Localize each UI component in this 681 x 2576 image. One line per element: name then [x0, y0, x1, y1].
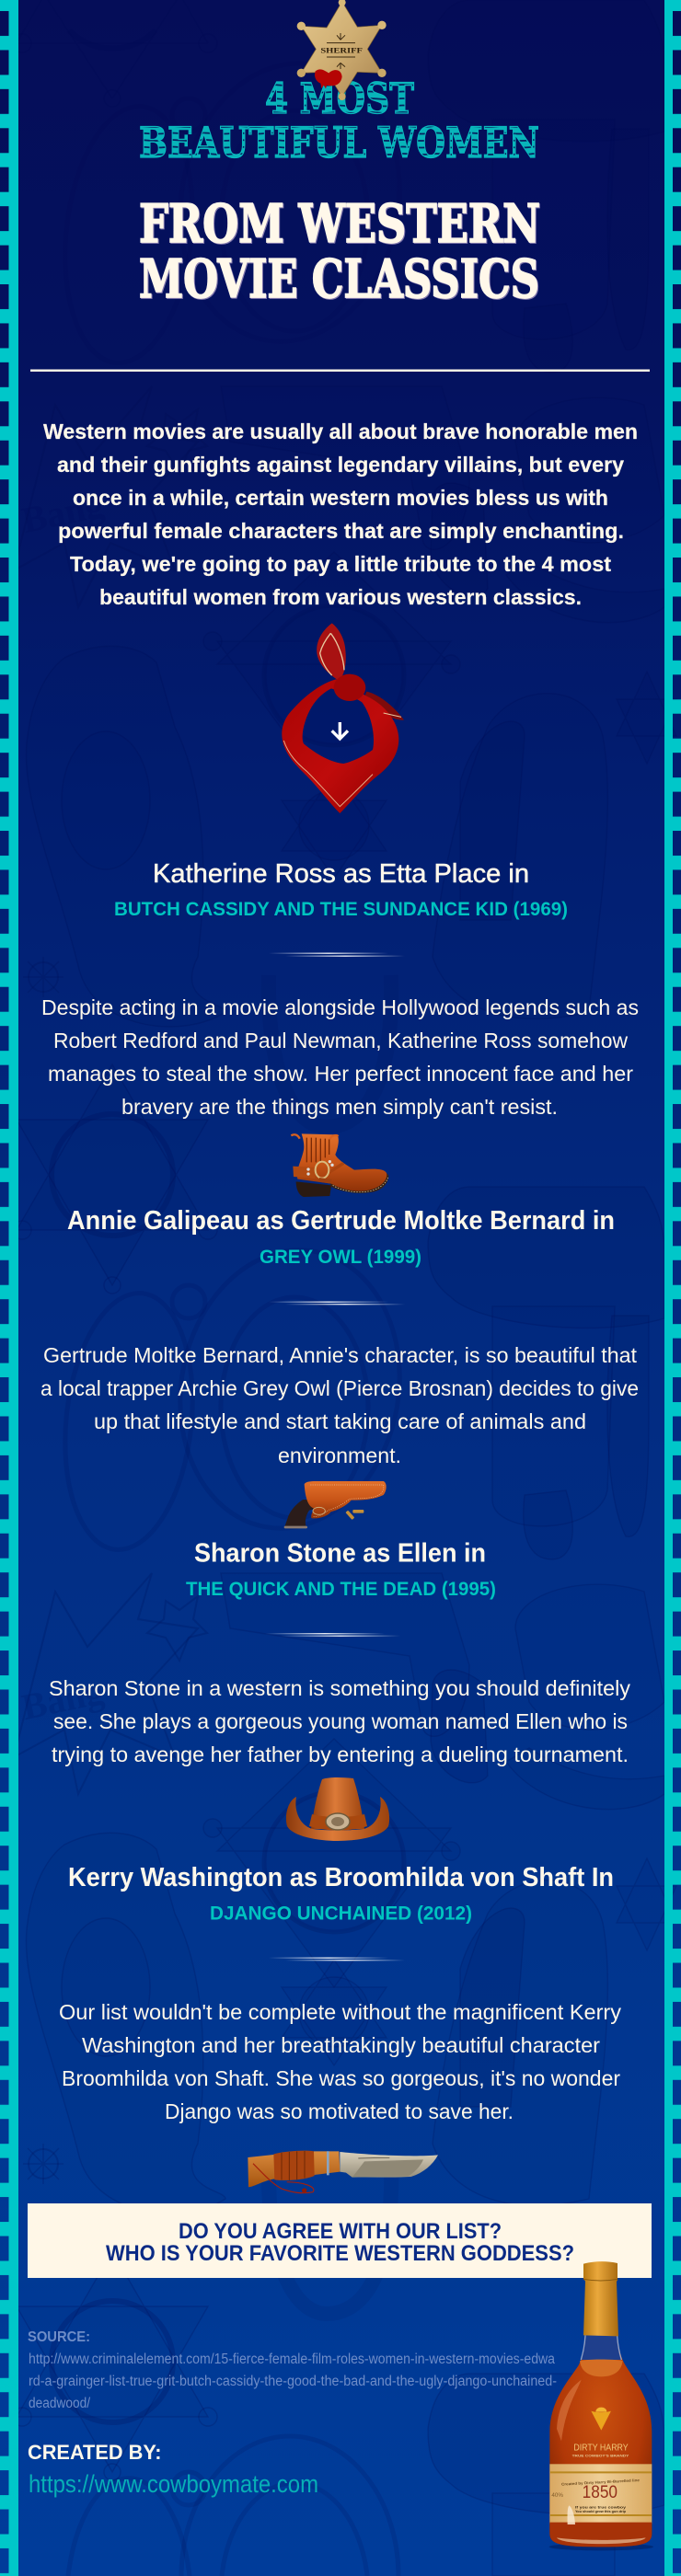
- icon: hunting knife: [248, 2151, 438, 2193]
- heading: Sharon Stone as Ellen in: [194, 1538, 486, 1568]
- heading: Annie Galipeau as Gertrude Moltke Bernard in: [67, 1206, 615, 1236]
- paragraph: Sharon Stone in a western is something you should definitely: [49, 1676, 631, 1700]
- title: from western movie classics: FROM WESTERN: [139, 193, 540, 255]
- icon: brandy bottle: If you are true cowboy: [575, 2505, 627, 2510]
- paragraph: up that lifestyle and start taking care of animals and: [94, 1409, 586, 1433]
- source block: [28, 2329, 557, 2411]
- movie title: GREY OWL (1999): [260, 1247, 421, 1268]
- source url: [29, 2352, 557, 2411]
- paragraph: [41, 995, 639, 1119]
- divider: [265, 1633, 400, 1637]
- paragraph: [49, 1676, 631, 1766]
- source label: SOURCE:: [28, 2329, 90, 2345]
- intro text: powerful female characters that are simply enchanting.: [58, 519, 624, 543]
- title: 4 most beautiful women: BEAUTIFUL WOMEN: [139, 118, 539, 167]
- paragraph: Robert Redford and Paul Newman, Katherine Ross somehow: [53, 1029, 628, 1052]
- intro text: [43, 420, 638, 609]
- title: 4 most beautiful women: 4 MOST: [265, 74, 414, 123]
- icon: brandy bottle: 1850: [583, 2483, 618, 2502]
- paragraph: Broomhilda von Shaft. She was so gorgeous, it's no wonder: [62, 2066, 620, 2090]
- movie title: BUTCH CASSIDY AND THE SUNDANCE KID (1969): [114, 899, 568, 920]
- icon: cowboy hat: [286, 1777, 389, 1841]
- intro text: Today, we're going to pay a little tribute to the 4 most: [70, 552, 611, 576]
- title: from western movie classics: [139, 193, 540, 310]
- callout: question box: DO YOU AGREE WITH OUR LIST?: [179, 2219, 502, 2244]
- paragraph: Gertrude Moltke Bernard, Annie's character, is so beautiful that: [43, 1343, 638, 1367]
- paragraph: [40, 1343, 639, 1467]
- section 2: Annie Galipeau: [40, 1206, 639, 1467]
- heading: Katherine Ross as Etta Place in: [153, 859, 529, 889]
- divider: [269, 1301, 405, 1305]
- movie title: THE QUICK AND THE DEAD (1995): [186, 1579, 496, 1600]
- icon: cowboy boot: [291, 1133, 388, 1197]
- intro text: beautiful women from various western classics.: [99, 585, 582, 609]
- paragraph: [59, 2000, 622, 2123]
- source url: deadwood/: [29, 2396, 91, 2411]
- title: from western movie classics: MOVIE CLASSICS: [139, 248, 539, 310]
- paragraph: manages to steal the show. Her perfect innocent face and her: [48, 1062, 633, 1086]
- icon: sheriff badge: SHERIFF: [320, 46, 363, 54]
- paragraph: a local trapper Archie Grey Owl (Pierce Brosnan) decides to give: [40, 1376, 639, 1400]
- section 3: Sharon Stone: [49, 1538, 631, 1766]
- movie title: DJANGO UNCHAINED (2012): [210, 1903, 472, 1925]
- paragraph: trying to avenge her father by entering a dueling tournament.: [52, 1742, 629, 1766]
- icon: brandy bottle: [549, 2261, 653, 2550]
- callout: question box: [28, 2203, 652, 2278]
- icon: brandy bottle: You should grow this gun drip: [575, 2509, 627, 2513]
- icon: brandy bottle: DIRTY HARRY: [573, 2443, 629, 2453]
- credit block: [28, 2441, 318, 2498]
- film strip: right edge: [664, 0, 681, 2576]
- paragraph: Our list wouldn't be complete without the magnificent Kerry: [59, 2000, 622, 2024]
- icon: sheriff badge: [297, 0, 387, 100]
- callout: question box: WHO IS YOUR FAVORITE WESTERN GODDESS?: [106, 2241, 574, 2266]
- paragraph: environment.: [278, 1443, 401, 1467]
- section 1: Katherine Ross: [41, 859, 639, 1119]
- paragraph: bravery are the things men simply can't resist.: [121, 1095, 558, 1119]
- icon: brandy bottle: Created by Dirty Harry Bi-Barrelled line: [561, 2478, 641, 2487]
- divider: [269, 953, 405, 957]
- paragraph: see. She plays a gorgeous young woman named Ellen who is: [53, 1709, 628, 1733]
- icon: revolver in holster: [284, 1481, 387, 1528]
- heading: Kerry Washington as Broomhilda von Shaft In: [68, 1863, 614, 1892]
- source url: http://www.criminalelement.com/15-fierce-female-film-roles-women-in-western-movies-edwa: [29, 2352, 555, 2367]
- intro text: once in a while, certain western movies bless us with: [73, 486, 608, 510]
- divider: title rule: [30, 370, 650, 372]
- credit url: https://www.cowboymate.com: [29, 2470, 318, 2498]
- section 4: Kerry Washington: [59, 1863, 622, 2123]
- film strip: left edge: [0, 0, 18, 2576]
- intro text: and their gunfights against legendary villains, but every: [57, 453, 624, 477]
- source url: rd-a-grainger-list-true-grit-butch-cassidy-the-good-the-bad-and-the-ugly-django-unchained-: [29, 2374, 557, 2389]
- icon: brandy bottle: TRUE COWBOY'S BRANDY: [572, 2455, 629, 2458]
- paragraph: Despite acting in a movie alongside Hollywood legends such as: [41, 995, 639, 1019]
- icon: brandy bottle: 40%: [551, 2492, 563, 2499]
- title: 4 most beautiful women: [139, 74, 539, 167]
- intro text: Western movies are usually all about brave honorable men: [43, 420, 638, 443]
- icon: red bandana with arrow: [282, 623, 404, 813]
- divider: [269, 1958, 405, 1961]
- paragraph: Django was so motivated to save her.: [165, 2099, 514, 2123]
- created by label: CREATED BY:: [28, 2441, 162, 2464]
- paragraph: Washington and her breathtakingly beautiful character: [82, 2033, 600, 2057]
